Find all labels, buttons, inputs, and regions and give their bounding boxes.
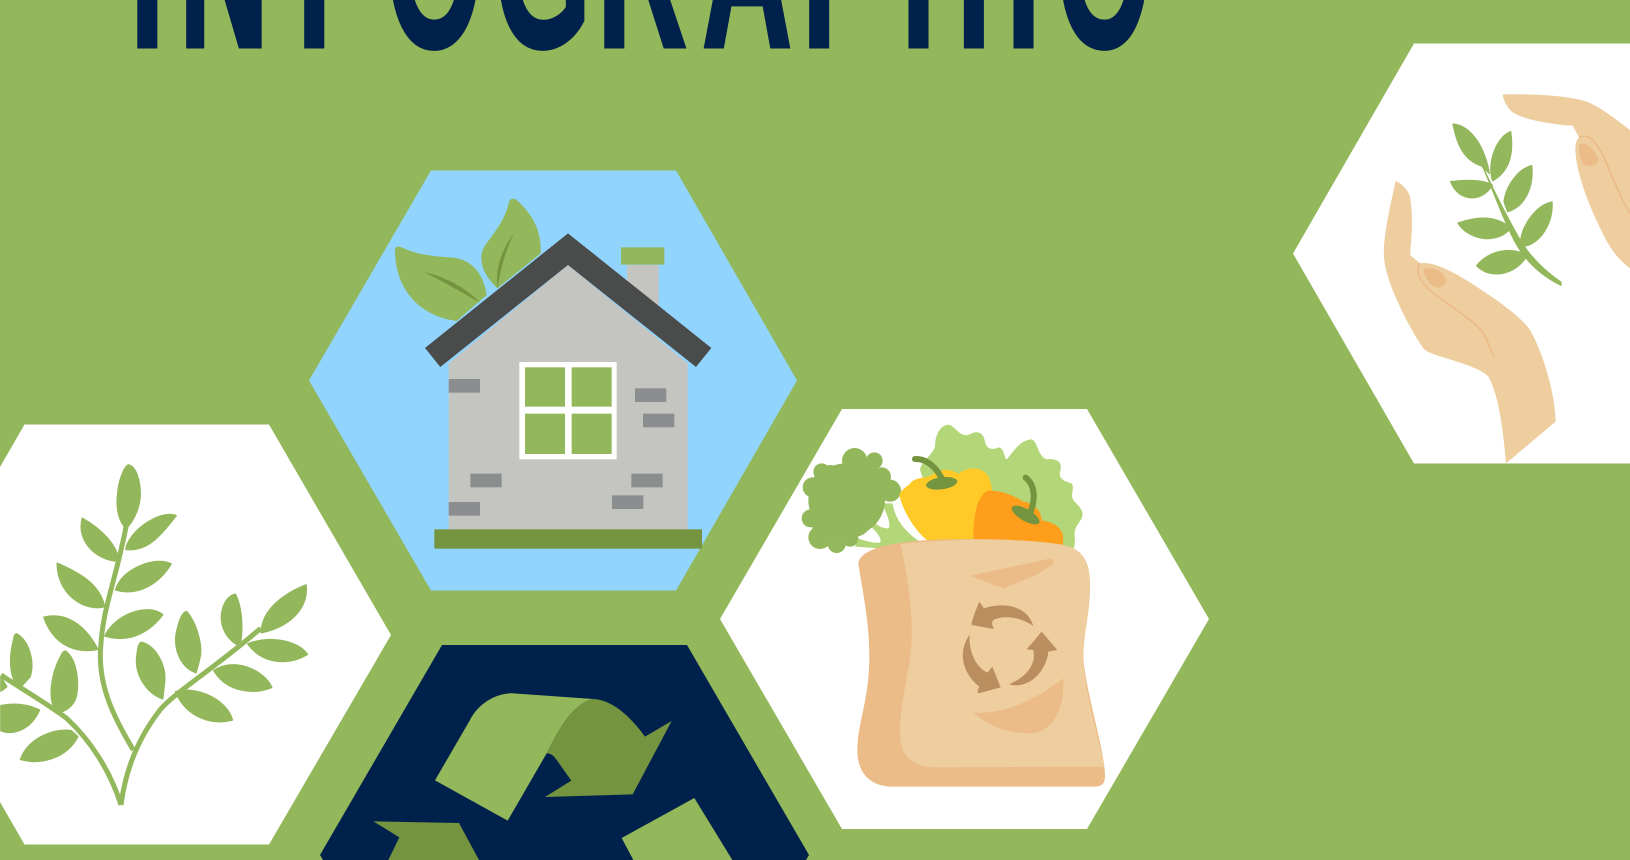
icon: hands protecting a sprig bbox=[1384, 94, 1630, 463]
icon: recycling arrows bbox=[373, 693, 732, 860]
icon: recycled grocery bag with vegetables bbox=[802, 425, 1105, 787]
panel: recycling bbox=[320, 645, 809, 860]
panel: produce bag bbox=[720, 409, 1209, 829]
icon: house with leaves bbox=[395, 199, 711, 549]
panel: plant bbox=[0, 424, 391, 844]
icon: branching plant bbox=[1, 465, 307, 805]
panel: eco house bbox=[309, 170, 797, 590]
panel: hands and sprig bbox=[1293, 44, 1630, 464]
